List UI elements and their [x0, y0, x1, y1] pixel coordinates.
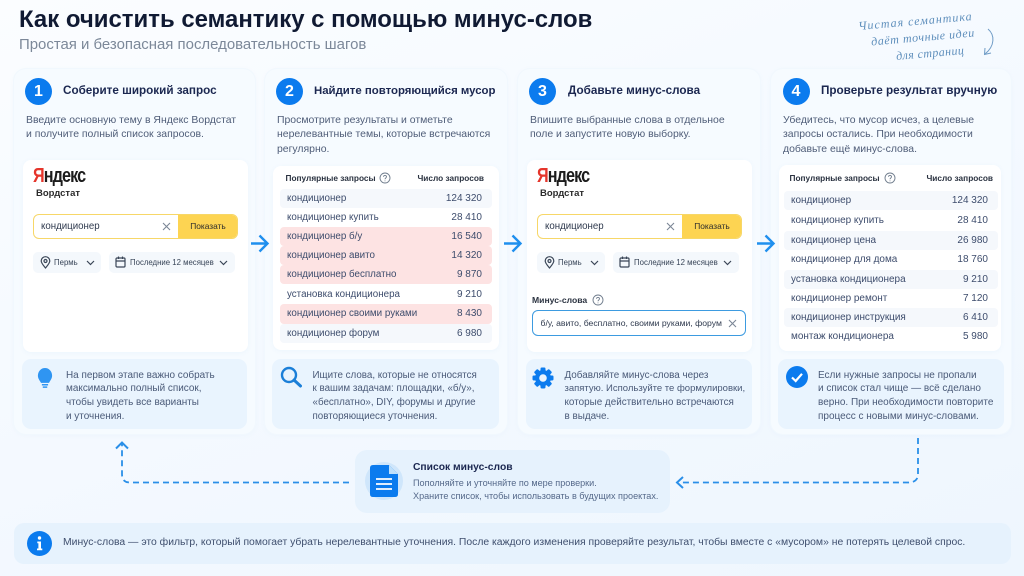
step 2 number: 2 [285, 82, 294, 100]
panel: step 2 [265, 69, 507, 434]
step 1 number [25, 78, 52, 104]
title: Как очистить семантику с помощью минус-слов [19, 6, 592, 32]
tip 1 text: чтобы увидеть все варианты [66, 397, 199, 408]
step 3 text [530, 115, 725, 140]
step 4 number [782, 78, 810, 104]
table header: Популярные запросы [790, 173, 880, 183]
row [791, 254, 988, 265]
tip 2 text [312, 370, 477, 422]
panel: bottom note [14, 523, 1011, 564]
tip 2 [272, 359, 499, 429]
row [784, 230, 998, 250]
step 2 heading: Найдите повторяющийся мусор [314, 85, 495, 97]
row: 7 120 [963, 293, 988, 304]
region filter: Пермь [558, 258, 582, 267]
search field: Показать [694, 221, 730, 231]
panel: minus-words list [355, 450, 670, 513]
tip 3 text: в выдаче. [564, 411, 609, 422]
row: flagged: 14 320 [451, 250, 482, 261]
row: установка кондиционера [287, 288, 400, 300]
tip 4 text: и список стал чище — всё сделано [818, 383, 981, 394]
subtitle: Простая и безопасная последовательность шагов [19, 36, 366, 52]
list text [413, 478, 658, 501]
step 1 number: 1 [34, 82, 43, 100]
row: кондиционер [791, 195, 851, 206]
tip 1 text: максимально полный список, [66, 383, 202, 394]
minus-words label: Минус-слова [532, 294, 587, 304]
tip 3 [526, 359, 752, 429]
step 3 text: поле и запустите новую выборку. [530, 129, 691, 140]
tip 3 text: которые действительно встречаются [564, 397, 734, 408]
row: flagged: кондиционер своими руками [287, 308, 417, 319]
row: 124 320 [446, 192, 482, 204]
arrow: step 3 to 4 [757, 234, 776, 252]
handwritten note: для страниц [896, 43, 965, 63]
row: кондиционер для дома [791, 254, 897, 265]
step 4 text: Убедитесь, что мусор исчез, а целевые [783, 115, 974, 126]
row [784, 270, 998, 288]
Wordstat label: Вордстат [540, 188, 584, 199]
tip 2 text: к вашим задачам: площадки, «б/у», [312, 383, 474, 394]
period filter: Последние 12 месяцев [634, 258, 718, 267]
tip 3 text [564, 370, 745, 422]
step 3 number [529, 78, 556, 104]
icon: check [786, 366, 808, 388]
list text: Храните список, чтобы использовать в будущих проектах. [413, 491, 658, 501]
row [280, 324, 492, 343]
row: монтаж кондиционера [791, 331, 894, 342]
row: кондиционер форум [287, 328, 379, 339]
step 1 text [26, 115, 236, 140]
row: кондиционер инструкция [791, 312, 906, 323]
Yandex logo: Яндекс [537, 165, 589, 187]
minus-words field: б/у, авито, бесплатно, своими руками, форум [540, 318, 722, 328]
step 4 text: добавьте ещё минус-слова. [783, 144, 917, 155]
row: кондиционер цена [791, 234, 876, 246]
step 1 text: и получите полный список запросов. [26, 129, 204, 140]
arrow: dashed return to step 1 [115, 441, 349, 484]
results table [273, 166, 499, 350]
tip 4 text [818, 370, 993, 422]
row: flagged: кондиционер бесплатно [287, 269, 396, 280]
row: 18 760 [957, 254, 988, 265]
step 2 text: Просмотрите результаты и отметьте [277, 115, 453, 126]
icon: light bulb [38, 368, 52, 388]
table header [790, 172, 993, 184]
row: 6 980 [457, 328, 482, 339]
row: flagged: 9 870 [457, 269, 482, 280]
step 4 number: 4 [792, 82, 800, 100]
panel: step 1 [14, 69, 255, 434]
icon: info [27, 531, 52, 556]
handwritten note: даёт точные идеи [871, 25, 975, 49]
tip 1 text: На первом этапе важно собрать [66, 370, 215, 381]
row: flagged: кондиционер б/у [287, 231, 362, 242]
tip 1 text [66, 370, 215, 422]
row [784, 308, 998, 327]
region filter: Пермь [54, 258, 78, 267]
icon: document [365, 462, 403, 500]
icon: handwritten arrow [984, 28, 994, 56]
search field [537, 214, 742, 239]
tip 4 text: процесс с новыми минус-словами. [818, 411, 979, 422]
step 2 text: регулярно. [277, 144, 329, 155]
region filter [33, 252, 101, 273]
row: 5 980 [963, 331, 988, 342]
step 4 heading: Проверьте результат вручную [821, 84, 997, 97]
Wordstat search card [23, 160, 248, 352]
Wordstat label: Вордстат [36, 188, 80, 199]
row [784, 191, 998, 210]
tip 3 text: запятую. Используйте те формулировки, [564, 383, 745, 394]
row: flagged [280, 265, 492, 284]
row: flagged [280, 304, 492, 324]
step 4 text [783, 115, 974, 155]
row: 124 320 [952, 195, 988, 206]
tip 2 text: «бесплатно», DIY, форумы и другие [312, 397, 476, 408]
row: кондиционер ремонт [791, 293, 887, 304]
table header [286, 172, 484, 184]
search field: кондиционер [41, 221, 100, 232]
tip 2 text: Ищите слова, которые не относятся [312, 370, 477, 381]
table header: Популярные запросы [286, 172, 376, 182]
list heading: Список минус-слов [413, 462, 513, 472]
panel: step 3 [518, 69, 760, 434]
row [287, 288, 482, 300]
row [280, 188, 492, 208]
step 2 number [276, 78, 303, 104]
step 2 text: нерелевантные темы, которые встречаются [277, 129, 490, 140]
step 3 number: 3 [538, 82, 547, 100]
step 1 heading: Соберите широкий запрос [63, 84, 217, 97]
icon: gear [532, 368, 554, 388]
icon: help [592, 294, 604, 306]
search field: кондиционер [545, 221, 604, 232]
row: flagged: 16 540 [451, 231, 482, 242]
tip 4 [778, 359, 1004, 429]
row [791, 215, 988, 226]
arrow: step 2 to 3 [504, 234, 522, 252]
panel: step 4 [771, 69, 1011, 434]
step 2 text [277, 115, 490, 155]
handwritten note [858, 9, 975, 63]
row: 9 210 [457, 288, 482, 300]
Yandex logo: Яндекс [33, 165, 85, 187]
search field [33, 214, 238, 239]
row: кондиционер [287, 192, 346, 204]
tip 1 [22, 359, 247, 429]
arrow: step 1 to 2 [251, 234, 270, 252]
row: 9 210 [963, 274, 988, 284]
row: кондиционер купить [791, 215, 884, 226]
row: flagged [280, 227, 492, 246]
search field: Показать [190, 221, 226, 231]
row: установка кондиционера [791, 274, 906, 284]
table header: Число запросов [926, 173, 993, 183]
row [791, 293, 988, 304]
row: 26 980 [957, 234, 988, 246]
row: flagged: кондиционер авито [287, 250, 375, 261]
period filter [109, 252, 235, 273]
table header: Число запросов [417, 172, 484, 182]
step 3 text: Впишите выбранные слова в отдельное [530, 115, 725, 126]
icon: magnifier [280, 366, 302, 388]
tip 4 text: верно. При необходимости повторите [818, 397, 993, 408]
row: flagged: 8 430 [457, 308, 482, 319]
step 4 text: запросы остались. При необходимости [783, 129, 973, 140]
row: 28 410 [957, 215, 988, 226]
row: кондиционер купить [287, 212, 379, 223]
list text: Пополняйте и уточняйте по мере проверки. [413, 478, 597, 488]
verified results table [779, 165, 1001, 351]
tip 4 text: Если нужные запросы не пропали [818, 370, 977, 381]
row [791, 331, 988, 342]
Wordstat minus-words card [527, 160, 752, 352]
row: flagged [280, 246, 492, 265]
step 1 text: Введите основную тему в Яндекс Вордстат [26, 115, 236, 126]
tip 1 text: и уточнения. [66, 411, 124, 422]
region filter [537, 252, 605, 273]
handwritten note: Чистая семантика [858, 9, 973, 33]
period filter: Последние 12 месяцев [130, 258, 214, 267]
period filter [613, 252, 739, 273]
note text: Минус-слова — это фильтр, который помогает убрать нерелевантные уточнения. После каждого изменения проверяйте результат, чтобы вместе с «мусором» не потерять целевой спрос. [63, 537, 965, 548]
step 3 heading: Добавьте минус-слова [568, 84, 700, 97]
tip 2 text: повторяющиеся уточнения. [312, 411, 437, 422]
row [287, 212, 482, 223]
row: 28 410 [451, 212, 482, 223]
arrow: dashed from step 4 to list [676, 438, 919, 489]
minus-words field [532, 310, 746, 336]
tip 3 text: Добавляйте минус-слова через [564, 370, 708, 381]
row: 6 410 [963, 312, 988, 323]
